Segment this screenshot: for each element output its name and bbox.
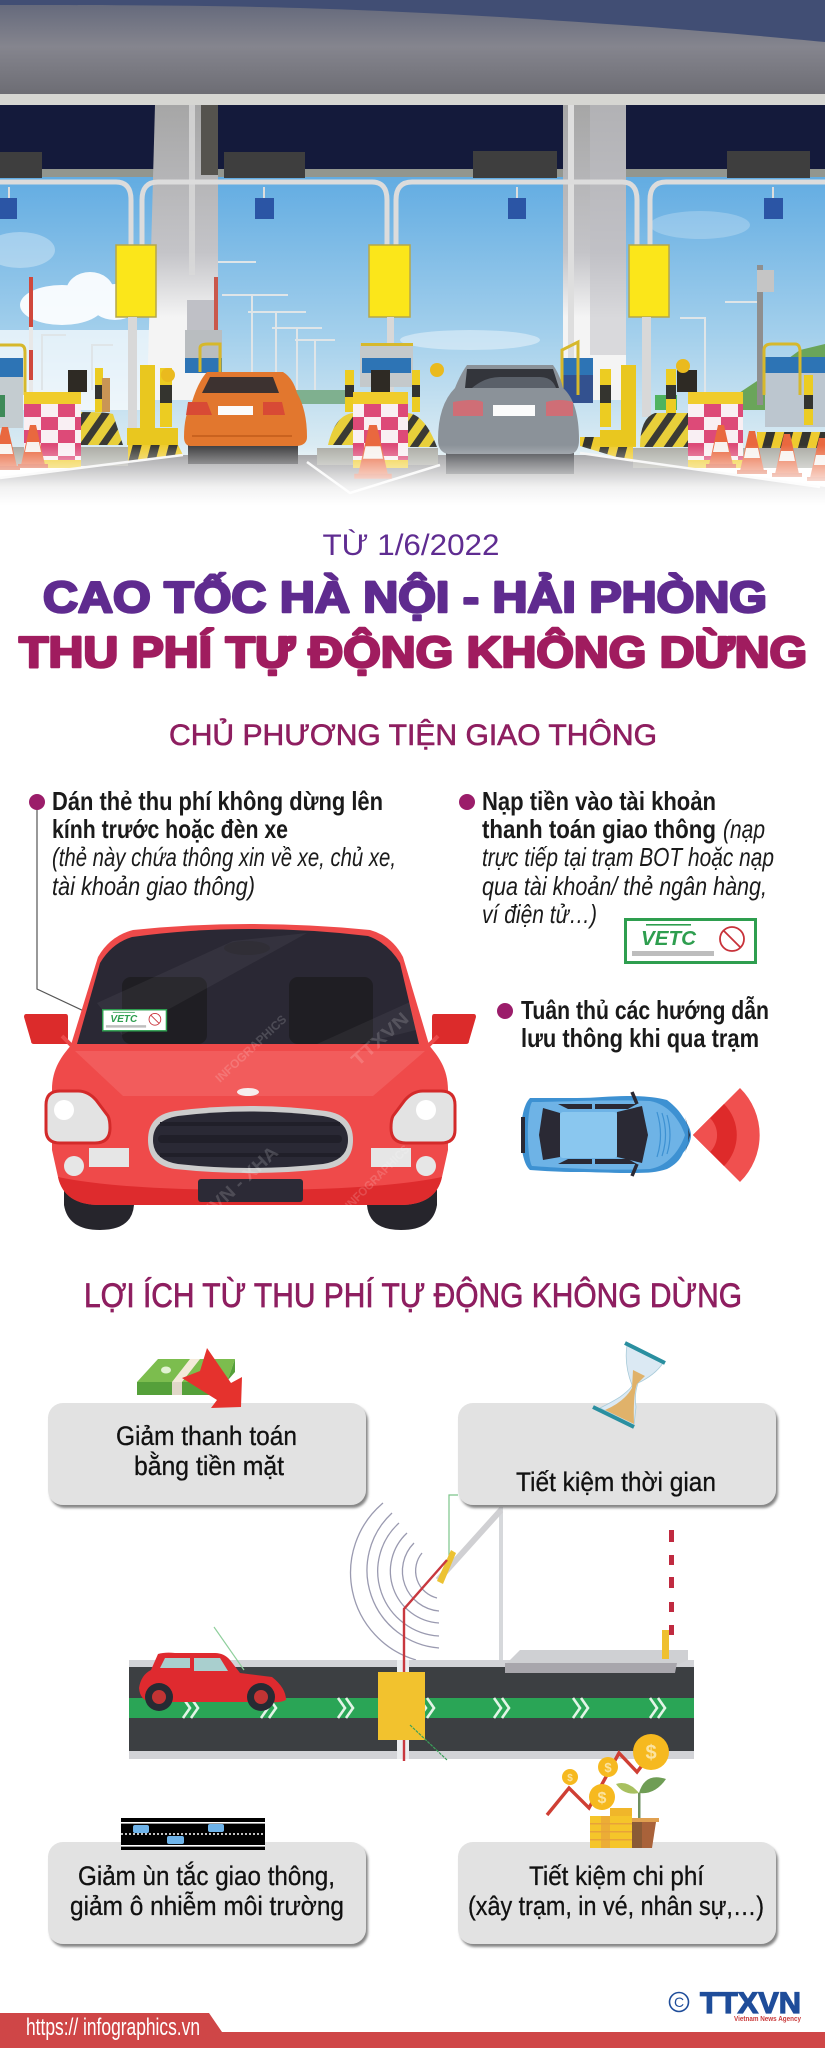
gantry arm: [438, 1510, 501, 1580]
panel: save cost: [458, 1842, 776, 1944]
date line: TỪ 1/6/2022: [322, 529, 500, 562]
panel: reduce cash payment: bằng tiền mặt: [134, 1450, 284, 1481]
panel: save time: [458, 1403, 776, 1505]
panel: reduce cash payment: Giảm thanh toán: [116, 1421, 297, 1451]
panel: save cost: Tiết kiệm chi phí: [529, 1861, 704, 1891]
yellow-black posts: [68, 359, 813, 447]
panel: reduce congestion: Giảm ùn tắc giao thông,: [78, 1860, 335, 1891]
yellow signs: [116, 245, 669, 317]
headlights: [46, 1091, 110, 1143]
bullet 2: top up account: (nạp: [723, 814, 765, 844]
barrier arm: [669, 1530, 674, 1635]
mirrors: [24, 1014, 68, 1044]
panel: save time: Tiết kiệm thời gian: [516, 1467, 716, 1497]
toll island: [378, 1672, 425, 1740]
toll station illustration: [0, 0, 825, 505]
watermarks: INFOGRAPHICS: [342, 1142, 412, 1212]
bullet 2: top up account: [459, 786, 774, 929]
bullet 1: stick the tag: tài khoản giao thông): [52, 871, 255, 901]
logo: TTXVN: Vietnam News Agency: [734, 2014, 802, 2023]
leader line from bullet to sticker: [37, 808, 103, 1020]
body: [52, 1044, 448, 1205]
checkered barrels: [24, 392, 743, 468]
roof: [70, 924, 430, 1048]
icon: road with cars: [121, 1818, 265, 1850]
icon: coins, chart and plant: [547, 1734, 669, 1848]
blue tags: [0, 198, 783, 219]
toll booths: [0, 330, 825, 428]
sign poles: [128, 317, 651, 429]
bullet 3: follow instructions: [497, 995, 769, 1053]
fade to white: [0, 445, 825, 505]
panel: reduce congestion: giảm ô nhiễm môi trường: [70, 1890, 344, 1921]
red signal sector: [693, 1088, 760, 1182]
hazard blocks: [80, 412, 123, 445]
panel: reduce cash payment: [48, 1403, 366, 1505]
bullet 2: top up account: ví điện tử…): [482, 899, 597, 929]
grille: [148, 1106, 353, 1173]
gray car: [438, 365, 579, 474]
hazard kerbs: [128, 445, 183, 463]
reader device: [437, 1550, 456, 1584]
bullet 3: follow instructions: lưu thông khi qua trạm: [521, 1023, 759, 1053]
bullet 3: follow instructions: Tuân thủ các hướng dẫn: [521, 995, 769, 1025]
clouds: [0, 211, 750, 410]
gantry vertical pole: [499, 1507, 503, 1660]
tyres: [64, 1190, 134, 1230]
watermarks: [179, 1008, 413, 1240]
heading: vehicle owners: CHỦ PHƯƠNG TIỆN GIAO THÔNG: [169, 718, 657, 752]
orange car: [184, 372, 307, 464]
icon: coins, chart and plant: $: [645, 1742, 657, 1764]
barrier arms: [29, 277, 33, 400]
icon: VETC tag: VETC: [641, 928, 697, 950]
green wire: [410, 1725, 447, 1760]
main title: [19, 571, 807, 677]
icon: VETC tag: [626, 920, 756, 962]
number plate: [198, 1179, 303, 1202]
icon: coins, chart and plant: $: [567, 1773, 573, 1784]
signal waves: [351, 1503, 439, 1660]
hood: [75, 1051, 425, 1096]
windshield VETC sticker: [103, 1010, 166, 1031]
street lights: [42, 262, 758, 400]
title line 2: THU PHÍ TỰ ĐỘNG KHÔNG DỪNG: [19, 626, 807, 677]
icon: hourglass: [593, 1343, 665, 1427]
RFID gantry diagram: [129, 1495, 694, 1761]
logo: TTXVN: [670, 1987, 802, 2023]
red wire: [404, 1560, 447, 1761]
icon: coins, chart and plant: $: [598, 1790, 607, 1807]
bullet 2: top up account: thanh toán giao thông: [482, 814, 716, 844]
green cable: [449, 1495, 458, 1557]
green lane: [129, 1698, 694, 1718]
roadside camera pole: [757, 265, 763, 405]
white post through road: [397, 1660, 409, 1759]
bullet 2: top up account: Nạp tiền vào tài khoản: [482, 786, 716, 816]
panel: reduce congestion: [48, 1842, 366, 1944]
icon: money with down arrow: [137, 1348, 242, 1408]
logo: TTXVN: TTXVN: [700, 1987, 801, 2020]
watermarks: TTXVN - XHA: [179, 1142, 282, 1240]
road: [129, 1660, 694, 1759]
bullet 1: stick the tag: [29, 786, 396, 901]
fog lamps: [89, 1148, 129, 1167]
concrete bases: [0, 447, 825, 468]
windshield VETC sticker: VETC: [110, 1014, 138, 1025]
pillars: [147, 105, 218, 400]
emblem: [237, 1088, 259, 1096]
toll platform: [505, 1650, 688, 1665]
footer bar: [0, 2013, 825, 2048]
lane chevrons: [183, 1698, 665, 1718]
traffic cones: [0, 425, 825, 481]
panel: save cost: (xây trạm, in vé, nhân sự,…): [468, 1891, 764, 1921]
roof: [0, 0, 825, 94]
watermarks: TTXVN: [347, 1008, 413, 1070]
road: [0, 455, 825, 505]
red car front view: [24, 924, 476, 1240]
blue car top view: [521, 1092, 691, 1176]
small red car: [139, 1627, 286, 1711]
footer bar: https:// infographics.vn: [26, 2014, 200, 2041]
windscreen: [77, 929, 419, 1044]
bullet 1: stick the tag: kính trước hoặc đèn xe: [52, 814, 288, 844]
lane markings: [0, 453, 820, 493]
hanging signs: [0, 151, 810, 178]
canopy edge: [0, 94, 825, 105]
heading: benefits: LỢI ÍCH TỪ THU PHÍ TỰ ĐỘNG KHÔNG DỪNG: [84, 1277, 742, 1315]
watermarks: INFOGRAPHICS: [212, 1012, 289, 1085]
canopy ceiling: [0, 105, 825, 169]
icon: coins, chart and plant: $: [604, 1760, 612, 1775]
gantry arches: [0, 182, 825, 245]
bullet 2: top up account: qua tài khoản/ thẻ ngân hàng,: [482, 871, 767, 901]
title line 1: CAO TỐC HÀ NỘI - HẢI PHÒNG: [43, 571, 767, 622]
distant treeline: [290, 390, 350, 404]
bullet 1: stick the tag: (thẻ này chứa thông xin về xe, chủ xe,: [52, 842, 396, 872]
bullet 1: stick the tag: Dán thẻ thu phí không dừng lên: [52, 786, 383, 816]
logo: TTXVN: C: [674, 1994, 684, 2010]
